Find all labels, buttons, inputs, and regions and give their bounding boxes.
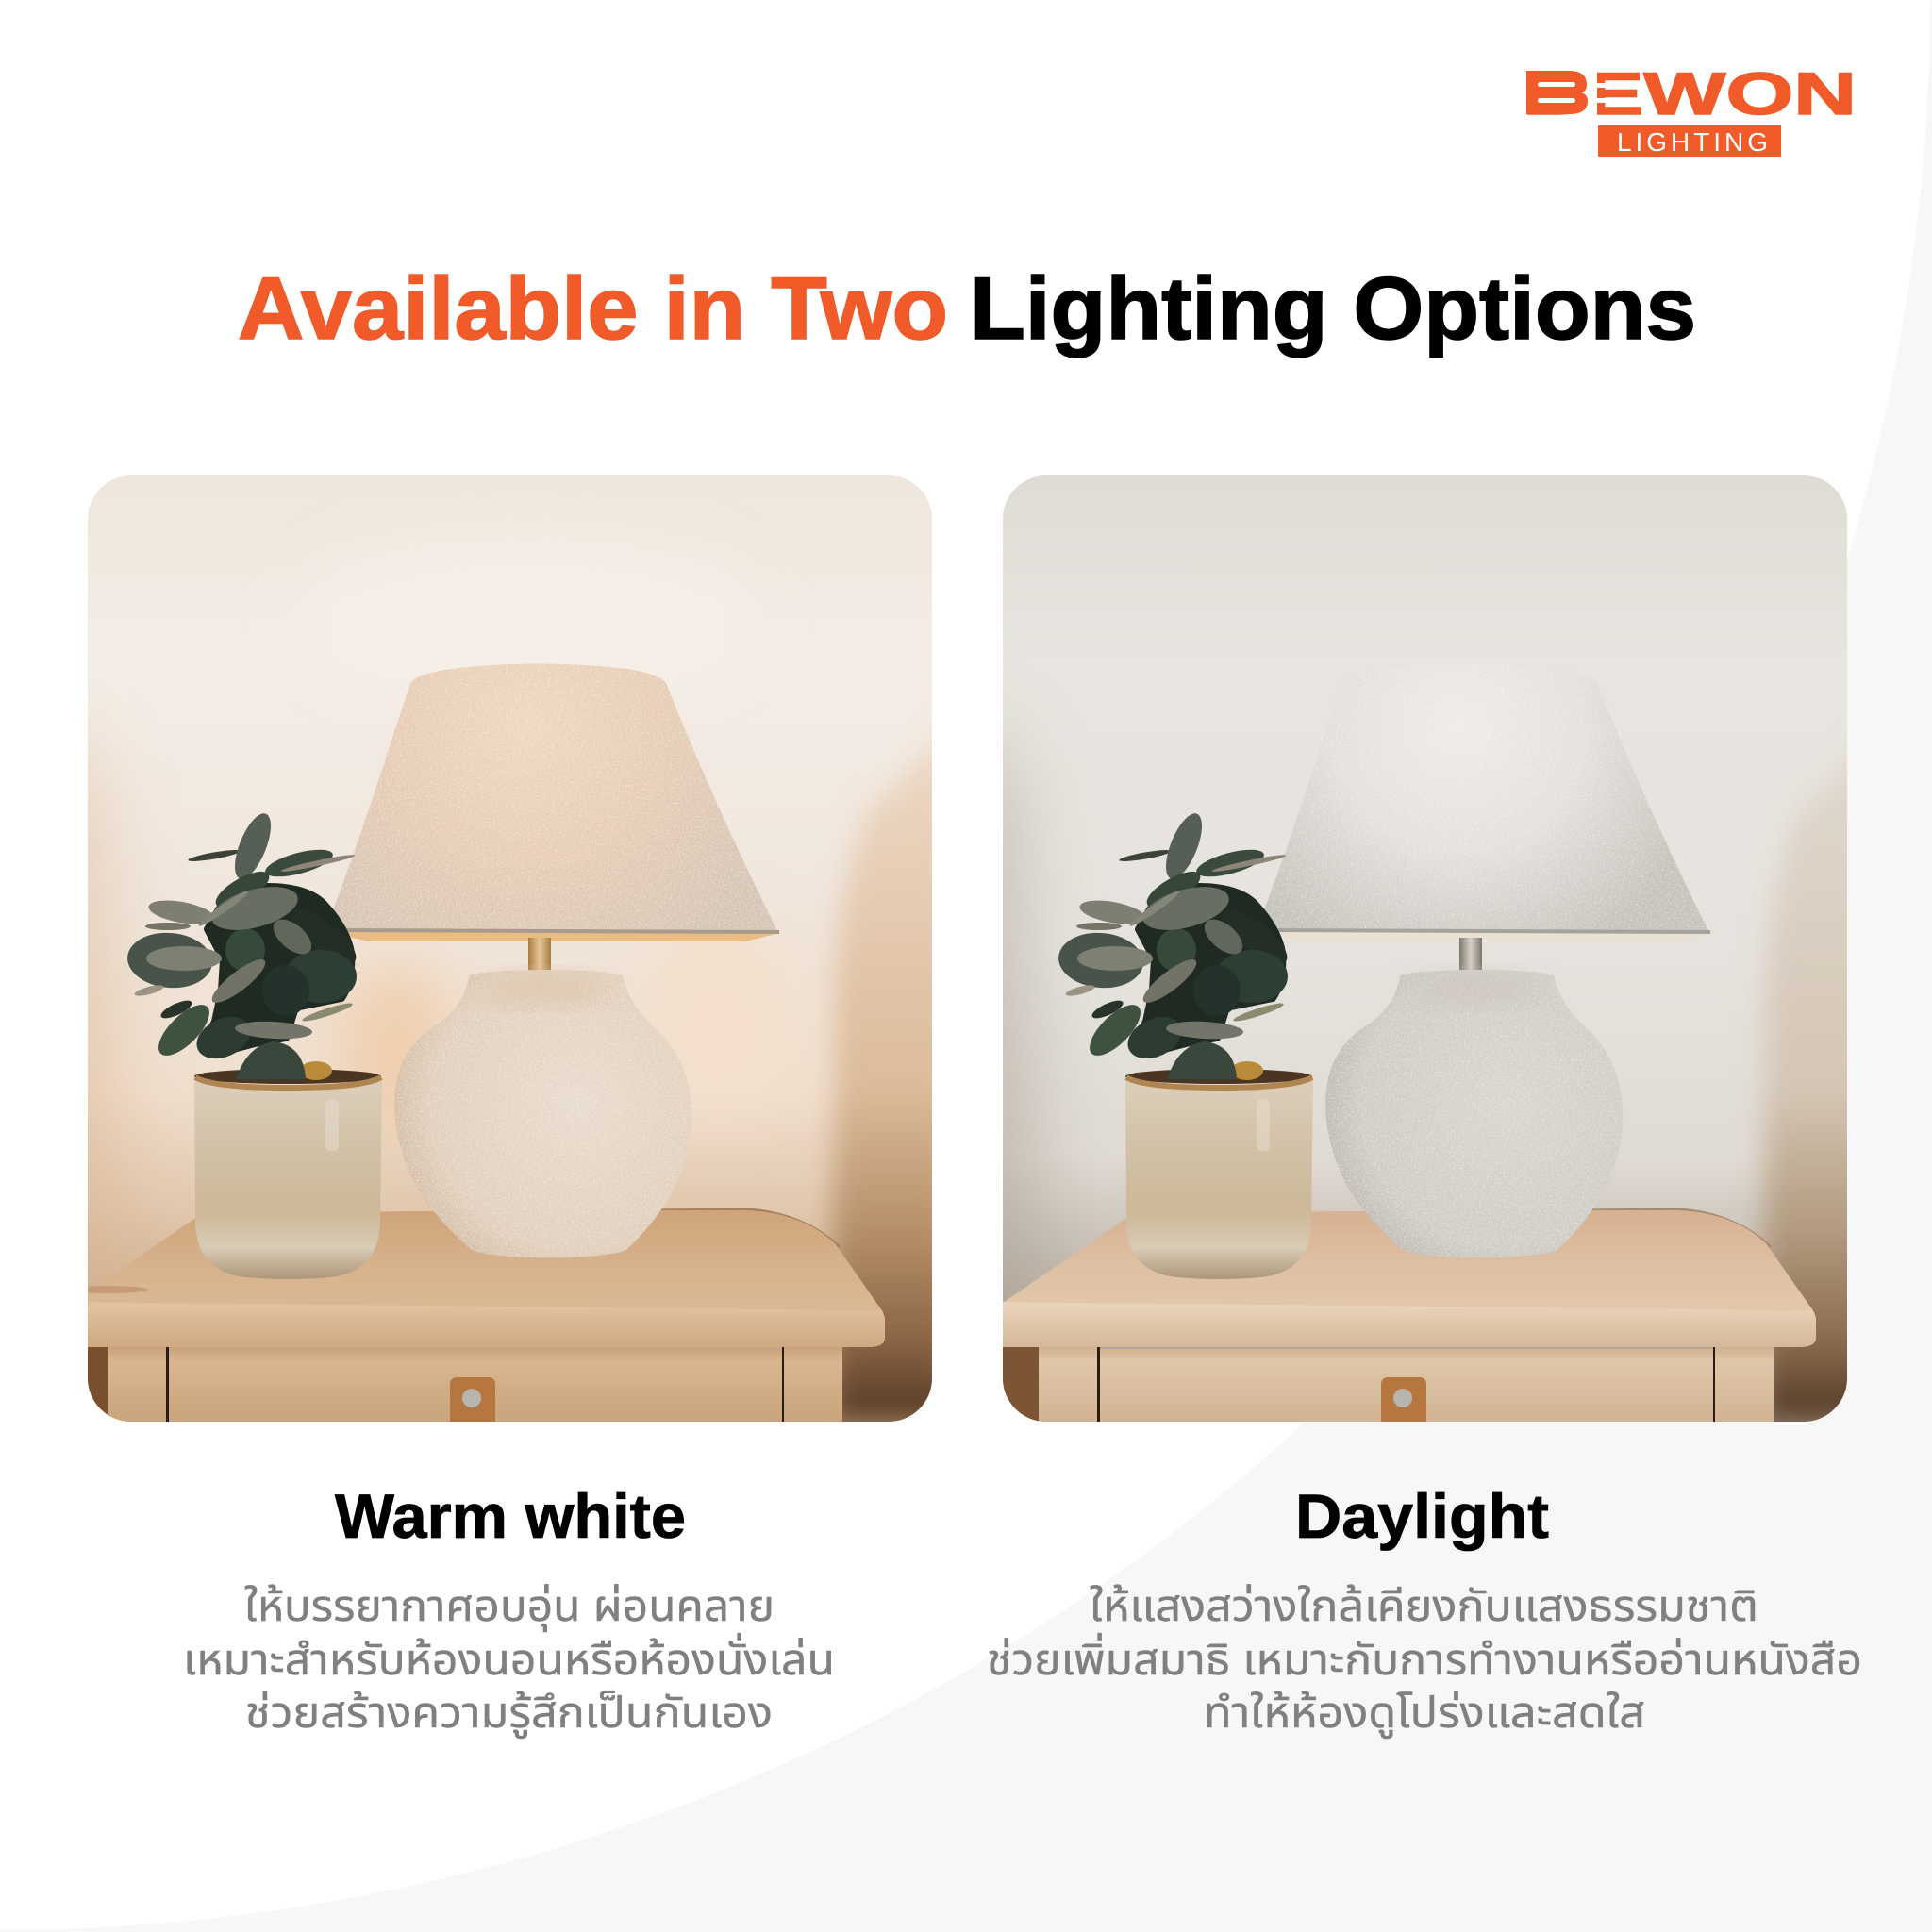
plant	[125, 808, 363, 1080]
nightstand	[57, 1210, 885, 1434]
title	[238, 258, 1696, 358]
text block: warm white description: ช่วยสร้างความรู้สึกเป็นกันเอง	[245, 1688, 773, 1739]
wall	[1003, 475, 1847, 1422]
text block: daylight description: ให้แสงสว่างใกล้เคียงกับแสงธรรมชาติ	[1090, 1581, 1758, 1630]
text block: daylight description: ช่วยเพิ่มสมาธิ เหมาะกับการทำงานหรืออ่านหนังสือ	[987, 1633, 1862, 1684]
pot	[194, 1069, 382, 1279]
title: Lighting Options	[970, 258, 1696, 358]
lamp base	[394, 970, 691, 1257]
pot	[1125, 1069, 1313, 1279]
title: Available in Two	[238, 258, 948, 358]
panel: daylight photo	[1003, 475, 1847, 1422]
nightstand	[988, 1210, 1816, 1434]
text block: warm white description: เหมาะสำหรับห้องนอนหรือห้องนั่งเล่น	[183, 1633, 835, 1684]
wall	[19, 475, 953, 1422]
logo: Bewon Lighting: BEWON	[1523, 61, 1857, 127]
lamp shade	[1256, 664, 1710, 941]
heading: daylight: Daylight	[1295, 1481, 1549, 1551]
cord	[1582, 1209, 1771, 1247]
plant	[1057, 808, 1294, 1080]
lamp base	[1325, 970, 1623, 1257]
cord	[651, 1209, 840, 1247]
text block: daylight description: ทำให้ห้องดูโปร่งและสดใส	[1204, 1688, 1645, 1739]
heading: warm white: Warm white	[335, 1481, 686, 1551]
text block: warm white description: ให้บรรยากาศอบอุ่น ผ่อนคลาย	[244, 1581, 774, 1632]
text block: daylight description	[987, 1581, 1862, 1739]
lamp stem	[1459, 938, 1482, 972]
lamp stem	[528, 938, 551, 972]
lamp shade	[325, 664, 779, 941]
text block: warm white description	[183, 1581, 835, 1739]
logo: Bewon Lighting	[1523, 61, 1857, 157]
logo: Bewon Lighting: LIGHTING	[1617, 127, 1768, 157]
panel: warm white photo	[88, 475, 932, 1422]
